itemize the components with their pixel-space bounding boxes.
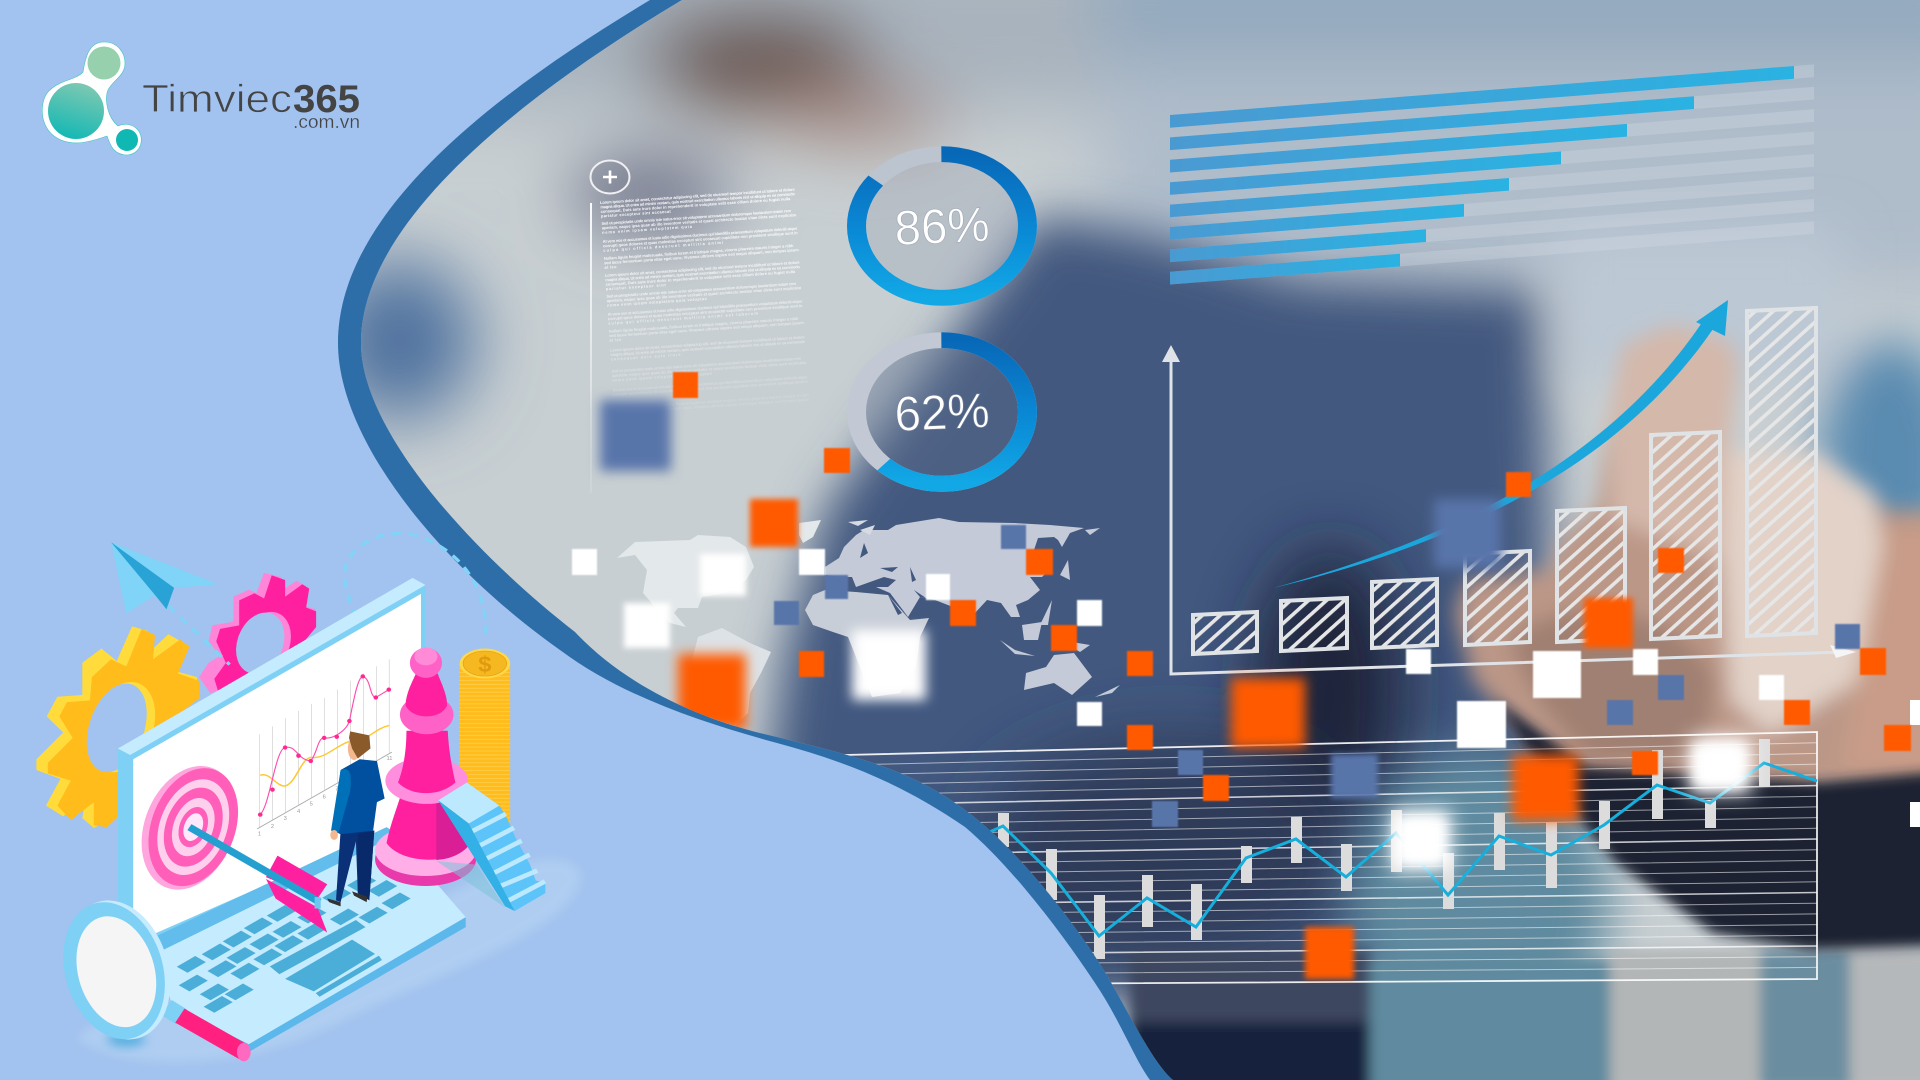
text block: pariatur excepteur sint bbox=[606, 282, 667, 291]
text block: Sed ut perspiciatis unde omnis iste natus error sit voluptatem accusantium doloremque laudantium totam rem bbox=[601, 208, 792, 226]
text block: Nullam ligula feugiat malesuada, finibus lorem et tristique magna, viverra pharetra mauris integer a nibh bbox=[609, 316, 799, 334]
text block: culpa qui officia deserunt mollitia animi est laborum bbox=[608, 310, 759, 326]
trackpad bbox=[285, 940, 375, 991]
growth bar chart bbox=[1162, 300, 1856, 674]
floating squares: blue bbox=[600, 400, 1860, 827]
blurred hand bbox=[1455, 325, 1920, 790]
coin stack: $ bbox=[478, 652, 492, 677]
dashed flight path bbox=[168, 533, 486, 689]
line chart on screen: 2 bbox=[271, 824, 274, 830]
line chart on screen: 11 bbox=[387, 756, 392, 762]
keyboard keys bbox=[177, 875, 411, 1013]
ground shadow bbox=[77, 859, 582, 1062]
trend arrow bbox=[1273, 300, 1728, 588]
world map bbox=[617, 518, 1120, 740]
plus icon bbox=[590, 160, 630, 194]
text block: Lorem ipsum dolor sit amet, consectetur adipiscing elit, sed do eiusmod tempor incididunt ut labore et dolore bbox=[605, 260, 800, 278]
target bbox=[125, 754, 253, 901]
text block: Lorem ipsum dolor sit amet, consectetur adipiscing elit, sed do eiusmod tempor incididunt ut labore et dolore bbox=[610, 334, 806, 353]
line chart on screen: 4 bbox=[297, 809, 300, 815]
line chart on screen bbox=[257, 659, 392, 838]
line chart on screen: 5 bbox=[310, 802, 313, 808]
text block: magna aliqua. Ut enim ad minim veniam, quis nostrud exercitation ullamco laboris nisi ut aliquip ex ea commodo bbox=[610, 339, 806, 357]
chess pawn bbox=[375, 647, 476, 886]
candles bbox=[998, 739, 1770, 959]
text block: nemo enim ipsam voluptatem quia bbox=[602, 224, 693, 235]
text block: Nullam ligula feugiat malesuada, finibus lorem et tristique magna, viverra pharetra mauris integer a nibh bbox=[604, 243, 794, 261]
text block: At vero eos et accusamus et iusto odio dignissimos ducimus qui blanditiis praesentium voluptatum deleniti atque bbox=[613, 374, 808, 393]
vertical rule bbox=[590, 203, 592, 493]
text block: magna aliqua. Ut enim ad minim veniam, quis nostrud exercitation ullamco laboris nisi ut aliquip ex ea commodo bbox=[605, 264, 801, 282]
arrow bbox=[189, 827, 327, 932]
text block: Sed ut perspiciatis unde omnis iste natus error sit voluptatem accusantium doloremque laudantium totam rem bbox=[606, 281, 797, 299]
candlestick chart bbox=[844, 732, 1817, 985]
donut chart 62%: 62% bbox=[893, 384, 991, 442]
donut chart 86% bbox=[856, 154, 1028, 298]
magnifying glass bbox=[48, 890, 251, 1061]
text block: aperiam, eaque ipsa quae ab illo inventore veritatis et quasi architecto beatae vitae dicta sunt explicabo bbox=[602, 212, 797, 230]
line chart on screen: 1 bbox=[258, 832, 261, 838]
text block: corrupti quos dolores et quas molestias excepturi sint occaecati cupiditate non provident similique sunt in bbox=[608, 303, 803, 321]
line chart on screen: 7 bbox=[335, 787, 338, 793]
text block: sed lacus fermentum porta vitae eget nunc. Vivamus ultrices sapien sed neque aliquam, non tempus ipsum bbox=[614, 397, 810, 415]
businessman bbox=[327, 731, 385, 906]
text block: Nullam ligula feugiat malesuada, finibus lorem et tristique magna, viverra pharetra mauris integer a nibh bbox=[614, 392, 809, 411]
text block: corrupti quos dolores et quas molestias excepturi sint occaecati cupiditate non provident similique sunt in bbox=[613, 379, 808, 397]
text block bbox=[600, 187, 810, 415]
text block: At vero eos et accusamus et iusto odio dignissimos ducimus qui blanditiis praesentium voluptatum deleniti atque bbox=[607, 298, 803, 317]
text block: nemo enim ipsam voluptatem quia voluptas bbox=[607, 296, 708, 308]
text block: magna aliqua. Ut enim ad minim veniam, quis nostrud exercitation ullamco laboris nisi ut aliquip ex ea commodo bbox=[600, 191, 796, 209]
text block: at leo bbox=[604, 264, 617, 270]
pink gear bbox=[199, 573, 316, 693]
text block: consequat. Duis aute irure dolor in reprehenderit in voluptate velit esse cillum dolore eu fugiat nulla bbox=[605, 269, 796, 287]
donut chart 62% bbox=[856, 340, 1028, 484]
text block: aperiam, eaque ipsa quae ab illo inventore veritatis et quasi architecto beatae vitae dicta sunt explicabo bbox=[612, 360, 807, 378]
text block: aperiam, eaque ipsa quae ab illo inventore veritatis et quasi architecto beatae vitae dicta sunt explicabo bbox=[607, 285, 802, 303]
illustration: isometric laptop with strategy icons bbox=[36, 533, 582, 1062]
frame and grid lines bbox=[844, 732, 1817, 985]
horizontal progress bars bbox=[1170, 64, 1814, 284]
text block: culpa qui officia deserunt mollitia animi bbox=[603, 240, 723, 253]
text block: consequat duis aute irure bbox=[611, 352, 681, 362]
text block: sed lacus fermentum porta vitae eget nunc. Vivamus ultrices sapien sed neque aliquam, non tempus ipsum bbox=[609, 320, 804, 338]
floating squares: white bbox=[572, 549, 1920, 870]
laptop screen bbox=[118, 578, 426, 952]
donut chart 86%: 86% bbox=[893, 198, 991, 256]
hatched bars bbox=[1193, 308, 1816, 654]
teal floor reflection bbox=[1350, 750, 1610, 1050]
text block: corrupti quos dolores et quas molestias excepturi sint occaecati cupiditate non provident similique sunt in bbox=[603, 230, 798, 248]
coin stack bbox=[459, 649, 510, 827]
text block: Lorem ipsum dolor sit amet, consectetur adipiscing elit, sed do eiusmod tempor incididunt ut labore et dolore bbox=[600, 187, 796, 205]
line chart on screen: 3 bbox=[284, 816, 287, 822]
text block: consequat. Duis aute irure dolor in reprehenderit in voluptate velit esse cillum dolore eu fugiat nulla bbox=[600, 196, 791, 214]
staircase bbox=[436, 782, 545, 911]
axes bbox=[1162, 345, 1856, 674]
text block: at leo bbox=[609, 337, 622, 343]
logo domain: .com.vn bbox=[293, 112, 360, 132]
text block: Sed ut perspiciatis unde omnis iste natus error sit voluptatem accusantium doloremque laudantium totam rem bbox=[611, 356, 802, 374]
text block: At vero eos et accusamus et iusto odio dignissimos ducimus qui blanditiis praesentium voluptatum deleniti atque bbox=[603, 226, 798, 244]
yellow gear bbox=[36, 626, 199, 828]
line chart on screen: 6 bbox=[323, 795, 326, 800]
logo wordmark: Timviec bbox=[142, 78, 292, 121]
logo icon bbox=[42, 42, 141, 155]
logo bbox=[42, 42, 360, 155]
logo number: 365 bbox=[293, 78, 360, 121]
floating squares: orange bbox=[673, 372, 1911, 979]
laptop base bbox=[153, 822, 466, 1052]
blurred sleeve bbox=[1495, 700, 1920, 950]
paper plane bbox=[111, 542, 218, 614]
price line bbox=[985, 763, 1817, 936]
text block: sed lacus fermentum porta vitae eget nunc. Vivamus ultrices sapien sed neque aliquam, non tempus ipsum bbox=[604, 247, 799, 265]
text block: pariatur excepteur sint occaecat bbox=[601, 209, 672, 218]
text block: nemo enim ipsam voluptatem quia voluptas bbox=[612, 371, 713, 383]
